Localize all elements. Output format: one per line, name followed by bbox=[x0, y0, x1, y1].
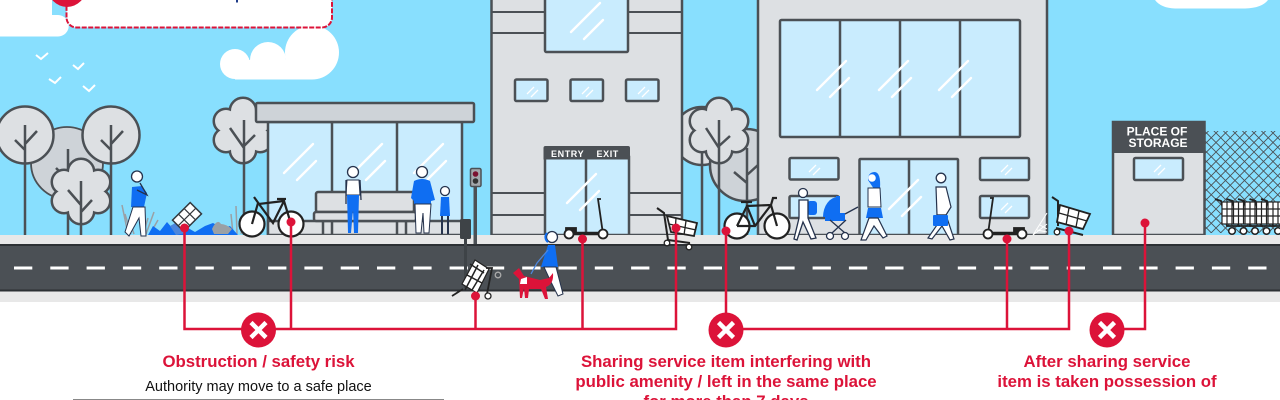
entry exit sign: ENTRY bbox=[551, 149, 584, 159]
place of storage building: STORAGE bbox=[1128, 136, 1188, 150]
entry exit sign: EXIT bbox=[596, 149, 619, 159]
text: authority action: Authority may move to a safe place bbox=[145, 379, 372, 395]
tree behind shelter bbox=[215, 99, 271, 237]
stacked shopping carts bbox=[1215, 199, 1280, 234]
heading: after possession: item is taken possession of bbox=[997, 372, 1217, 391]
shopping cart: abandoned bbox=[1052, 197, 1090, 235]
place of storage building bbox=[1112, 121, 1206, 235]
cobweb bbox=[1033, 213, 1047, 235]
callout box bbox=[48, 0, 332, 28]
person: woman with pram bbox=[861, 172, 887, 240]
tree group centre bbox=[673, 99, 782, 236]
cloud: middle bbox=[220, 26, 339, 80]
icon: cross sharing service bbox=[708, 312, 744, 348]
entry exit sign bbox=[544, 146, 630, 160]
cloud: top right bbox=[1155, 0, 1268, 8]
trolley on road crossing bbox=[452, 260, 501, 299]
connector pins bbox=[180, 218, 1150, 300]
heading: after possession: After sharing service bbox=[1024, 352, 1190, 371]
footpath and road bbox=[0, 235, 1280, 302]
traffic light bbox=[460, 168, 481, 288]
pram bbox=[823, 196, 858, 240]
bicycle: bus shelter bbox=[240, 197, 304, 236]
bicycle: centre bbox=[724, 198, 790, 238]
weeds and debris in water bbox=[122, 205, 246, 235]
person: man with child bbox=[411, 166, 450, 234]
person with backpack bbox=[794, 188, 817, 240]
heading: sharing service item: public amenity / left in the same place bbox=[575, 372, 877, 391]
heading: sharing service item: Sharing service item interfering with bbox=[581, 352, 871, 371]
icon: cross obstruction bbox=[241, 312, 276, 348]
discarded trolley in water bbox=[173, 203, 201, 231]
shopping cart: entry bbox=[657, 208, 697, 250]
divider under authority text bbox=[73, 399, 444, 400]
person: woman at shelter bbox=[346, 166, 361, 233]
building: entry and exit bbox=[491, 0, 682, 235]
birds bbox=[36, 53, 95, 91]
heading: obstruction: Obstruction / safety risk bbox=[162, 352, 355, 371]
pedestrian with guide dog bbox=[513, 232, 563, 299]
building: large glazed bbox=[758, 0, 1047, 235]
e-scooter: storage side bbox=[984, 198, 1026, 238]
chain link fence bbox=[1205, 131, 1280, 233]
bus shelter bbox=[256, 103, 474, 235]
icon: cross possession bbox=[1090, 312, 1124, 348]
e-scooter: entry bbox=[564, 199, 608, 238]
person thinking bbox=[125, 171, 147, 236]
place of storage building: PLACE OF bbox=[1127, 124, 1187, 138]
red connector lines bbox=[184, 222, 1145, 329]
cloud: top left bbox=[0, 0, 69, 36]
sky background bbox=[0, 0, 1280, 236]
tree group left bbox=[0, 106, 140, 237]
person walking with bag bbox=[928, 173, 954, 240]
